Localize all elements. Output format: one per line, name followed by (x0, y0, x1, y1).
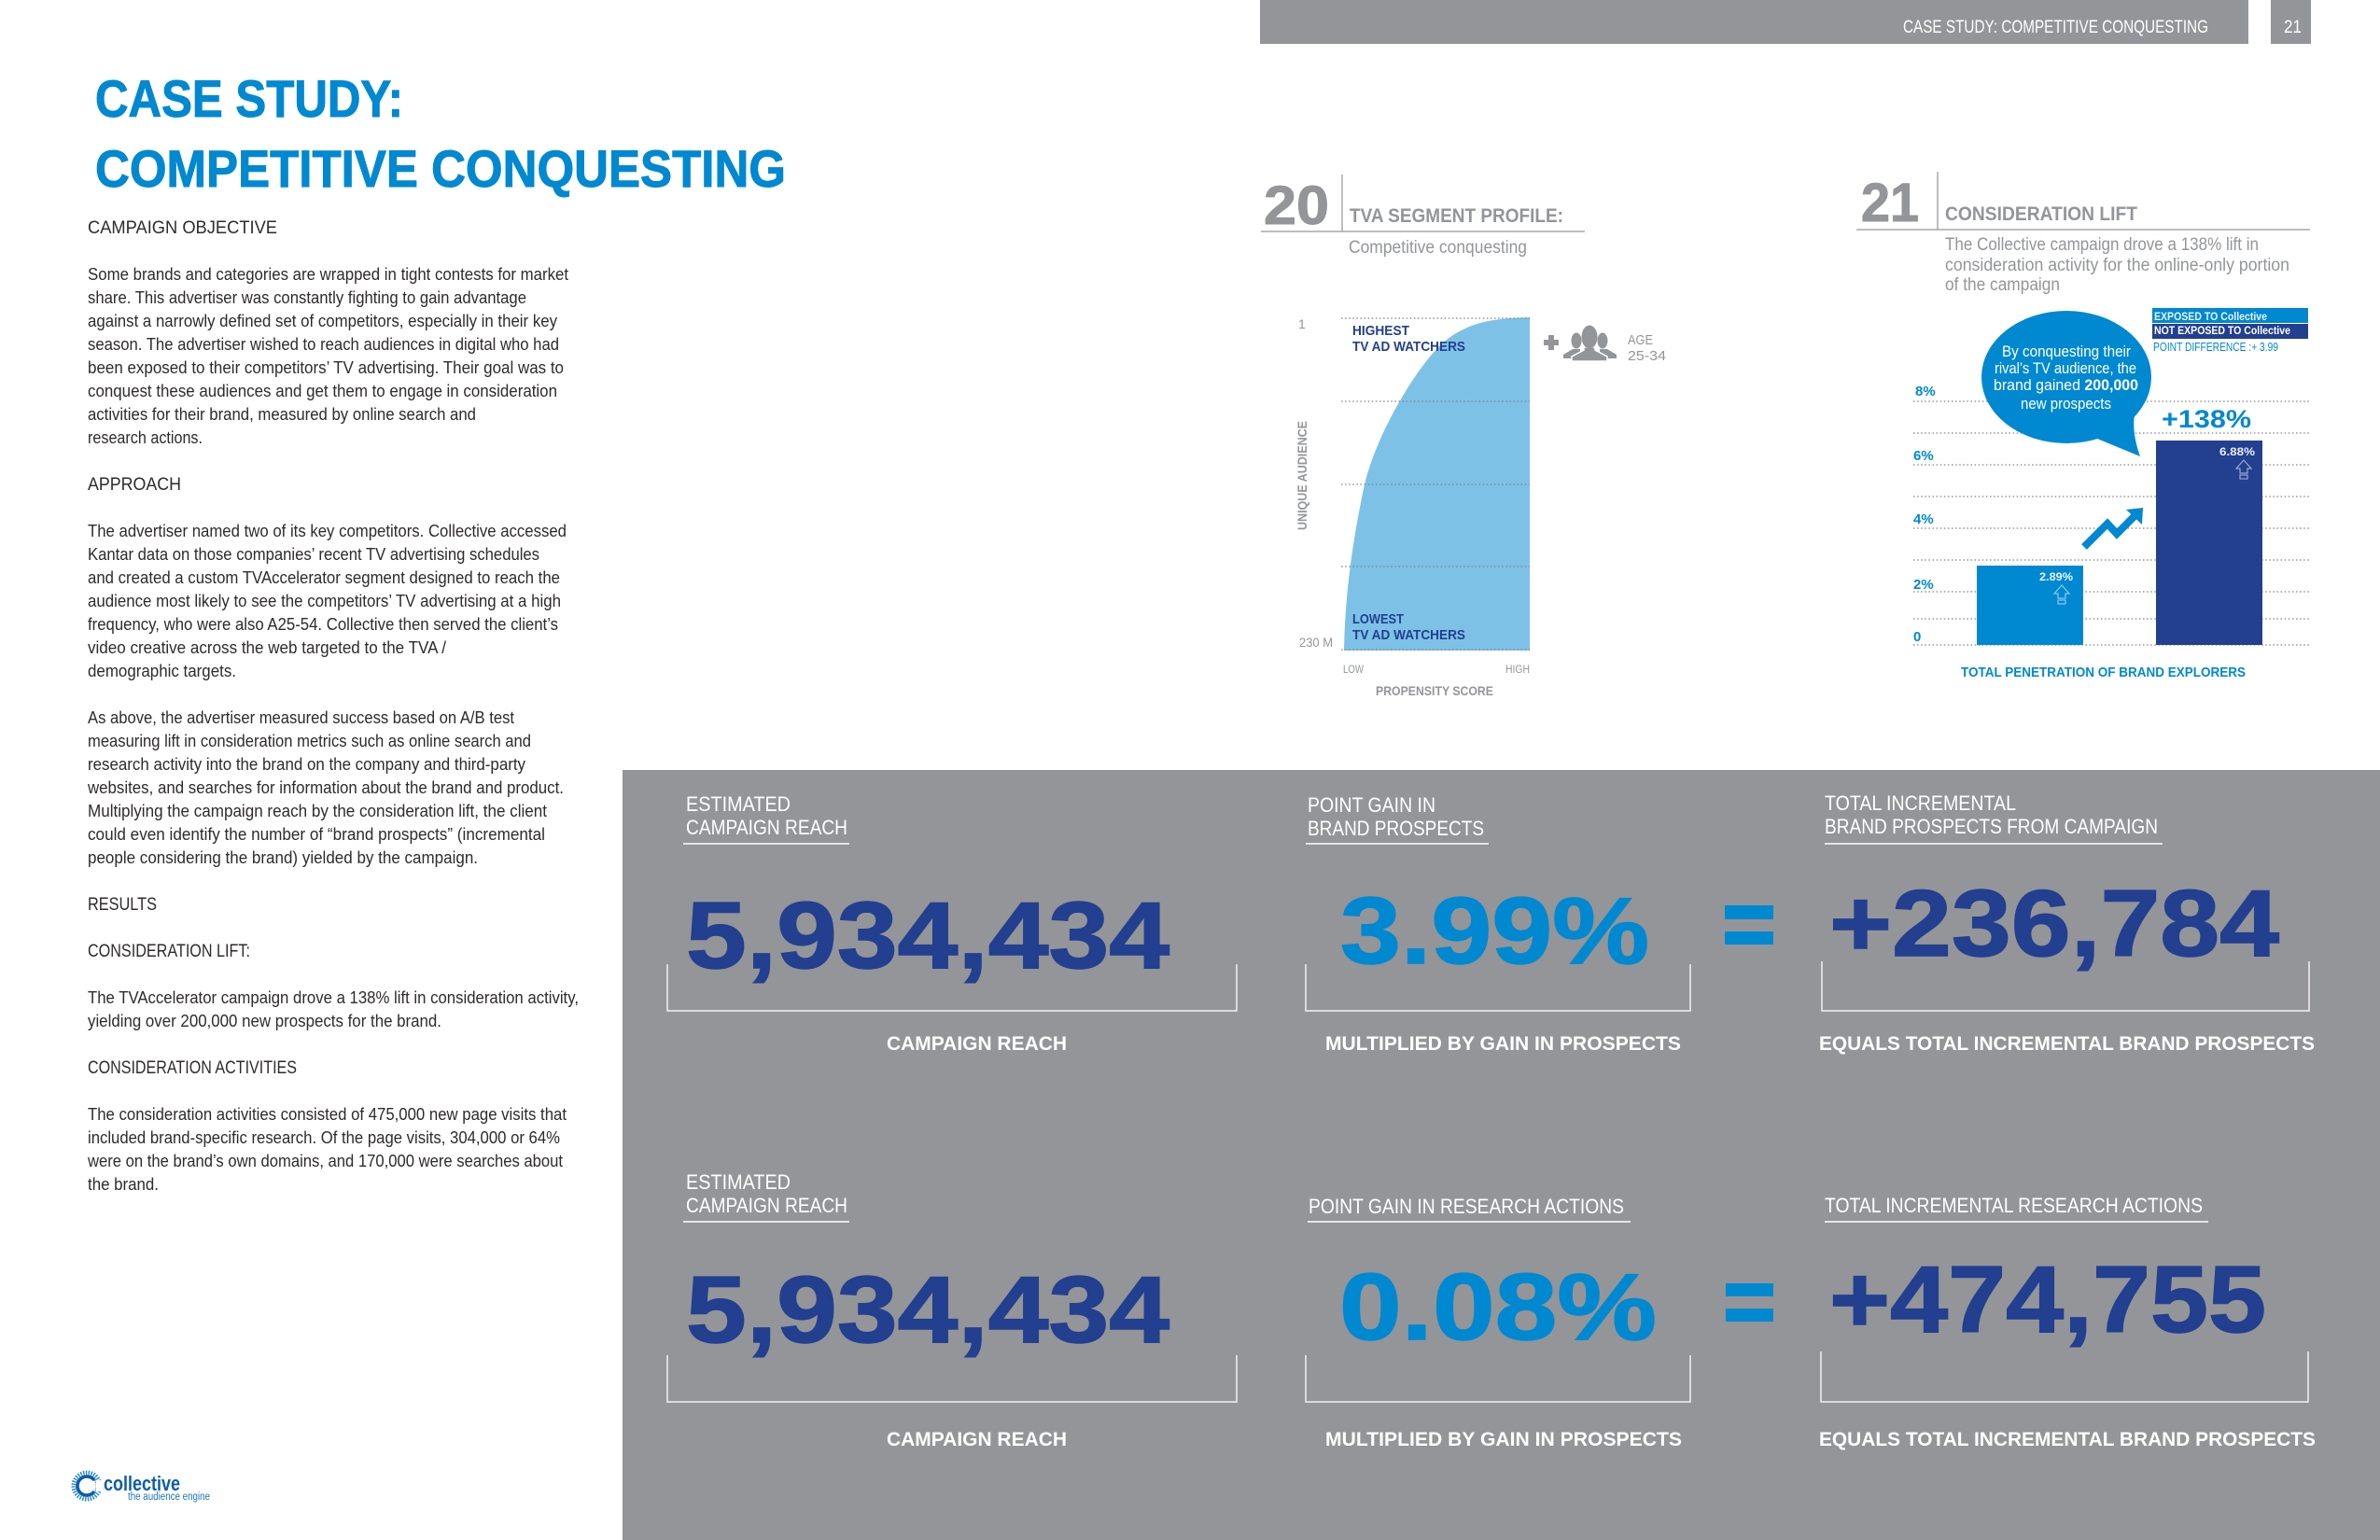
heading: figure 20 (1261, 175, 1585, 258)
estimated campaign reach: CAMPAIGN REACH (686, 1194, 847, 1217)
point gain in brand prospects: POINT GAIN IN (1308, 793, 1435, 817)
total incremental brand prospects: EQUALS TOTAL INCREMENTAL BRAND PROSPECTS (1819, 1033, 2315, 1055)
title: COMPETITIVE CONQUESTING (95, 139, 786, 198)
icon: people (1563, 325, 1617, 361)
point gain in brand prospects: 3.99% (1340, 879, 1649, 984)
total incremental research actions: EQUALS TOTAL INCREMENTAL BRAND PROSPECTS (1819, 1429, 2316, 1450)
estimated campaign reach: CAMPAIGN REACH (887, 1033, 1067, 1055)
total incremental research actions: TOTAL INCREMENTAL RESEARCH ACTIONS (1825, 1194, 2203, 1217)
campaign objective: activities for their brand, measured by online search and (88, 404, 476, 424)
campaign objective (88, 217, 568, 447)
estimated campaign reach: 5,934,434 (686, 1258, 1169, 1363)
results (87, 894, 579, 1194)
logo: collective: collective (104, 1472, 180, 1495)
equals sign (1726, 1283, 1773, 1322)
point gain in research actions: MULTIPLIED BY GAIN IN PROSPECTS (1325, 1429, 1682, 1450)
bar chart: 2% (1913, 577, 1934, 593)
point gain in brand prospects: BRAND PROSPECTS (1308, 817, 1484, 840)
campaign objective: been exposed to their competitors’ TV advertising. Their goal was to (88, 357, 564, 377)
approach: research activity into the brand on the company and third-party (88, 754, 526, 774)
bar: not exposed: 6.88% (2219, 445, 2255, 458)
campaign objective: Some brands and categories are wrapped in tight contests for market (88, 264, 568, 284)
title: CASE STUDY: (95, 69, 403, 128)
estimated campaign reach (667, 1170, 1237, 1450)
panel: calculations (623, 770, 2380, 1540)
age label (1628, 332, 1666, 364)
icon: plus (1544, 335, 1559, 350)
total incremental brand prospects: BRAND PROSPECTS FROM CAMPAIGN (1825, 815, 2158, 838)
area chart (1295, 316, 1530, 698)
estimated campaign reach: ESTIMATED (686, 792, 791, 816)
results: yielding over 200,000 new prospects for the brand. (88, 1011, 441, 1030)
title (95, 69, 786, 198)
page number: 21 (2284, 18, 2302, 37)
heading: figure 20: TVA SEGMENT PROFILE: (1350, 205, 1563, 227)
bar: exposed: 2.89% (2039, 570, 2073, 583)
estimated campaign reach: ESTIMATED (686, 1170, 791, 1194)
legend: EXPOSED TO Collective (2154, 310, 2267, 323)
approach: Kantar data on those companies’ recent TV advertising schedules (88, 544, 539, 564)
heading: figure 21: CONSIDERATION LIFT (1945, 203, 2137, 225)
bar chart: 0 (1913, 629, 1921, 645)
heading: figure 21: 21 (1861, 173, 1919, 233)
age label: AGE (1628, 332, 1653, 348)
approach: people considering the brand) yielded by the campaign. (88, 847, 478, 867)
text column (87, 217, 579, 1194)
results: CONSIDERATION LIFT: (88, 941, 250, 961)
estimated campaign reach (667, 792, 1237, 1055)
panel: consideration lift (1856, 172, 2311, 680)
equals sign (1725, 905, 1773, 945)
approach (87, 474, 567, 867)
row 2 (667, 1170, 2316, 1450)
arrow (2084, 508, 2143, 547)
bar chart: 6% (1913, 448, 1934, 464)
bar: not exposed (2156, 441, 2262, 645)
lift value: +138% (2162, 405, 2251, 433)
campaign objective: season. The advertiser wished to reach audiences in digital who had (88, 334, 559, 354)
area chart: TV AD WATCHERS (1352, 627, 1465, 643)
point gain in brand prospects (1306, 793, 1690, 1055)
bar chart (1913, 384, 2311, 680)
header bar (1260, 0, 2248, 44)
results: CONSIDERATION ACTIVITIES (88, 1057, 297, 1078)
total incremental brand prospects: TOTAL INCREMENTAL (1825, 791, 2016, 815)
total incremental research actions (1819, 1194, 2316, 1450)
callout (1981, 311, 2151, 456)
area chart: HIGHEST (1352, 323, 1409, 339)
approach: audience most likely to see the competitors’ TV advertising at a high (88, 591, 561, 610)
logo: collective: the audience engine (128, 1491, 210, 1503)
point gain in brand prospects: MULTIPLIED BY GAIN IN PROSPECTS (1325, 1033, 1681, 1055)
approach: demographic targets. (88, 661, 236, 680)
total incremental brand prospects (1819, 791, 2315, 1055)
approach: and created a custom TVAccelerator segment designed to reach the (88, 567, 560, 587)
heading: figure 21 (1856, 172, 2310, 295)
approach: could even identify the number of “brand prospects” (incremental (88, 824, 545, 844)
legend (2152, 308, 2308, 354)
results: RESULTS (88, 894, 157, 915)
area chart: PROPENSITY SCORE (1376, 683, 1493, 698)
approach: measuring lift in consideration metrics such as online search and (88, 731, 531, 750)
results: included brand-specific research. Of the page visits, 304,000 or 64% (88, 1127, 560, 1147)
heading: figure 21: of the campaign (1945, 275, 2060, 295)
age label: 25-34 (1628, 348, 1666, 364)
heading: figure 20: 20 (1264, 175, 1329, 236)
area chart: TV AD WATCHERS (1352, 339, 1465, 355)
area chart: LOWEST (1352, 611, 1404, 627)
results: were on the brand’s own domains, and 170,000 were searches about (87, 1151, 563, 1170)
total incremental brand prospects: +236,784 (1829, 872, 2279, 976)
bar chart: 4% (1913, 511, 1934, 527)
campaign objective: conquest these audiences and get them to engage in consideration (88, 381, 557, 400)
panel: TVA segment profile (1261, 175, 1666, 698)
legend: POINT DIFFERENCE :+ 3.99 (2153, 340, 2278, 354)
area chart: HIGH (1505, 663, 1530, 676)
heading: figure 20: Competitive conquesting (1349, 238, 1527, 258)
approach: frequency, who were also A25-54. Collective then served the client’s (88, 614, 558, 634)
approach: Multiplying the campaign reach by the consideration lift, the client (88, 801, 547, 820)
estimated campaign reach: 5,934,434 (686, 884, 1169, 988)
row 1 (667, 791, 2315, 1055)
logo: collective (75, 1472, 210, 1503)
approach: The advertiser named two of its key competitors. Collective accessed (88, 521, 567, 540)
bar chart: 8% (1915, 384, 1936, 399)
results: the brand. (88, 1174, 159, 1194)
header bar: CASE STUDY: COMPETITIVE CONQUESTING (1903, 18, 2208, 37)
approach: As above, the advertiser measured success based on A/B test (88, 707, 514, 727)
area chart: 230 M (1299, 635, 1333, 650)
area chart: LOW (1343, 663, 1365, 676)
area chart: UNIQUE AUDIENCE (1295, 421, 1309, 530)
approach: video creative across the web targeted to the TVA / (88, 637, 447, 657)
campaign objective: share. This advertiser was constantly fighting to gain advantage (88, 287, 526, 307)
estimated campaign reach: CAMPAIGN REACH (686, 816, 847, 839)
legend: NOT EXPOSED TO Collective (2154, 324, 2290, 337)
area chart: 1 (1298, 316, 1306, 331)
bar chart: TOTAL PENETRATION OF BRAND EXPLORERS (1961, 665, 2246, 680)
callout: rival’s TV audience, the (1995, 359, 2136, 377)
campaign objective: CAMPAIGN OBJECTIVE (88, 217, 277, 238)
callout: new prospects (2021, 395, 2111, 413)
point gain in research actions: 0.08% (1339, 1255, 1657, 1360)
approach: APPROACH (88, 474, 181, 495)
point gain in research actions: POINT GAIN IN RESEARCH ACTIONS (1309, 1195, 1624, 1218)
total incremental research actions: +474,755 (1829, 1248, 2266, 1352)
callout: By conquesting their (2002, 343, 2131, 360)
page number (2271, 0, 2311, 44)
point gain in research actions (1306, 1195, 1690, 1450)
campaign objective: research actions. (88, 427, 203, 447)
heading: figure 21: consideration activity for the online-only portion (1945, 256, 2289, 275)
results: The TVAccelerator campaign drove a 138% lift in consideration activity, (88, 987, 579, 1007)
results: The consideration activities consisted of 475,000 new page visits that (88, 1104, 567, 1124)
bar: exposed (1977, 566, 2083, 645)
approach: websites, and searches for information about the brand and product. (87, 777, 564, 797)
heading: figure 21: The Collective campaign drove a 138% lift in (1945, 235, 2259, 255)
campaign objective: against a narrowly defined set of competitors, especially in their key (88, 311, 558, 330)
estimated campaign reach: CAMPAIGN REACH (887, 1429, 1067, 1450)
callout: brand gained 200,000 (1994, 376, 2138, 394)
